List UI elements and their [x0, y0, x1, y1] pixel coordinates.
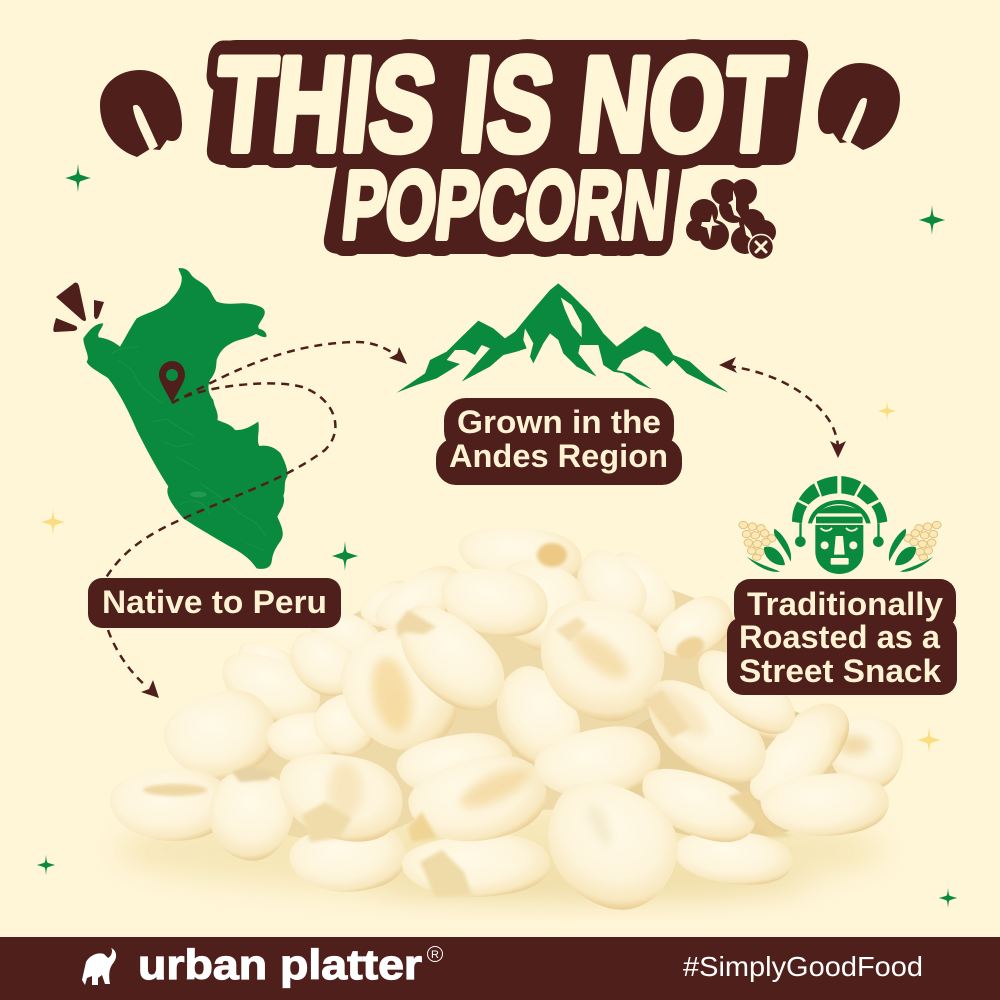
label: Traditionally Roasted as a Street Snack: Traditionally: [747, 586, 943, 622]
dashed route to mountains: [172, 342, 400, 403]
title: THIS IS NOT POPCORN: [207, 29, 808, 259]
ear pendants: [795, 523, 884, 547]
location pin: [159, 361, 185, 403]
label: Traditionally Roasted as a Street Snack: Street Snack: [739, 653, 941, 689]
corn left: [739, 521, 791, 572]
label: Native to Peru: [88, 578, 341, 628]
arrowhead near mountains: [719, 357, 737, 373]
dashed route below label: [108, 630, 146, 686]
kernel front right upper: [683, 639, 807, 747]
label: Traditionally Roasted as a Street Snack: [727, 579, 957, 695]
yellow patches and germs on front kernels: [143, 760, 792, 897]
star yellow 2: [878, 401, 896, 421]
corn right: [889, 521, 941, 572]
back filler: [210, 570, 850, 840]
label: Grown in the Andes Region: Grown in the: [457, 404, 661, 440]
star green 4: [37, 855, 55, 875]
brand name: urban platter: [138, 941, 422, 988]
label: Traditionally Roasted as a Street Snack: Roasted as a: [739, 619, 940, 655]
yellow patches and germs on mid kernels: [366, 610, 871, 755]
star yellow 1: [41, 509, 65, 535]
map of Peru: [83, 268, 288, 569]
kernels mid: [156, 581, 911, 840]
label: Grown in the Andes Region: Grown in the: [457, 404, 661, 440]
kernel pile: [109, 523, 911, 930]
registered mark: R: [431, 949, 439, 961]
star green 2: [918, 205, 946, 235]
headdress: [792, 476, 887, 523]
icon: corn kernel right: [818, 63, 900, 150]
star green 3: [331, 541, 359, 571]
footer bar: [0, 937, 1000, 1000]
mountains: [397, 283, 728, 393]
arrowhead near figure: [830, 441, 846, 458]
face: [815, 525, 863, 574]
arrowhead to mountains: [389, 347, 407, 364]
icon: Inca figure with corn: [739, 476, 941, 574]
title: THIS IS NOT POPCORN: POPCORN: [338, 153, 674, 259]
dashed route mountains to figure: [728, 366, 838, 448]
kernels front: [109, 719, 795, 930]
germ tip top: [537, 543, 567, 567]
soft shadow under pile: [115, 805, 885, 900]
title: THIS IS NOT POPCORN: THIS IS NOT: [208, 29, 791, 179]
hashtag: #SimplyGoodFood: [683, 951, 923, 982]
star green 5: [939, 888, 957, 908]
label: Native to Peru: Native to Peru: [102, 584, 327, 620]
dashed route to kernels: [100, 383, 335, 588]
icon: crossed-out popcorn: [686, 179, 776, 260]
back kernels: [211, 523, 743, 735]
arrowhead to kernels: [141, 680, 159, 698]
label: Grown in the Andes Region: Andes Region: [449, 438, 668, 474]
callout marks near map: [53, 283, 104, 332]
registered mark: [428, 946, 442, 962]
label: Grown in the Andes Region: Andes Region: [449, 438, 668, 474]
star green 1: [65, 164, 91, 192]
germ tip rear right: [672, 633, 708, 663]
star yellow 3: [917, 727, 941, 753]
label: Grown in the Andes Region: [436, 398, 682, 485]
icon: elephant logo: [82, 948, 116, 985]
icon: corn kernel left: [100, 70, 182, 157]
title: THIS IS NOT POPCORN: POPCORN: [338, 153, 674, 259]
title: THIS IS NOT POPCORN: THIS IS NOT: [208, 29, 791, 179]
